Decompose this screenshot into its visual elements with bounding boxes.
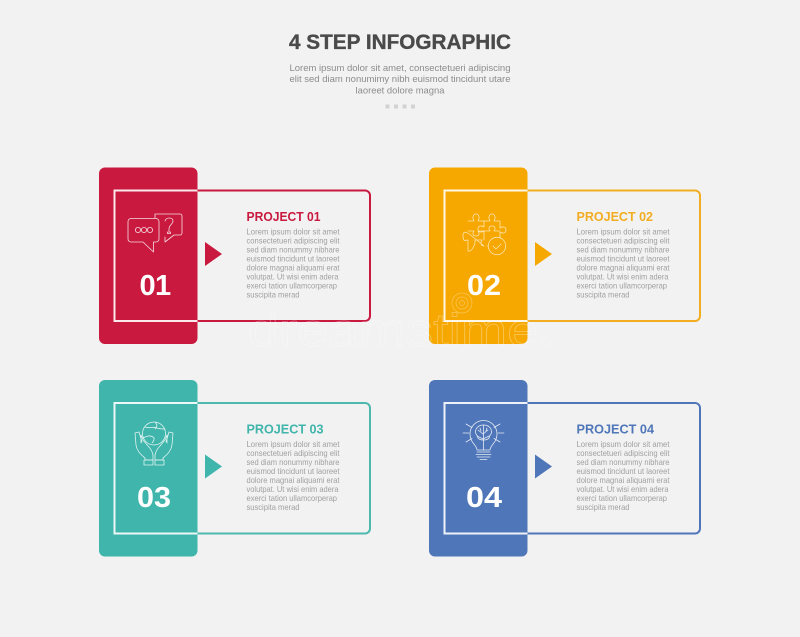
- icon: light bulb with brain: [463, 420, 504, 460]
- body text 03: dolore magnai aliquami erat: [246, 475, 340, 485]
- outline frame 03: [114, 403, 370, 534]
- arrow 02: [535, 242, 552, 266]
- subtitle: [290, 62, 510, 96]
- watermark: [248, 293, 550, 356]
- body text 03: suscipita merad: [246, 502, 300, 512]
- body text 04: [576, 439, 670, 512]
- body text 04: sed diam nonummy nibhare: [576, 457, 670, 467]
- step number 04: 04: [466, 482, 502, 514]
- body text 02: euismod tincidunt ut laoreet: [576, 254, 670, 264]
- panel: project 01: [99, 168, 370, 344]
- outline frame 02: [444, 190, 700, 321]
- body text 01: consectetueri adipiscing elit: [246, 236, 340, 246]
- body text 03: euismod tincidunt ut laoreet: [246, 466, 340, 476]
- body text 02: [576, 226, 670, 300]
- panel: project 03: [99, 380, 370, 556]
- subtitle: Lorem ipsum dolor sit amet, consectetueri adipiscing: [290, 62, 510, 73]
- colored block 04: [429, 380, 528, 556]
- body text 03: exerci tation ullamcorperap: [246, 493, 337, 503]
- body text 03: sed diam nonummy nibhare: [246, 457, 340, 467]
- body text 03: volutpat. Ut wisi enim adera: [246, 484, 339, 494]
- body text 04: dolore magnai aliquami erat: [576, 475, 670, 485]
- outline frame 01: [114, 190, 370, 321]
- icon: hands holding globe: [135, 422, 173, 465]
- body text 02: exerci tation ullamcorperap: [576, 280, 667, 290]
- body text 02: volutpat. Ut wisi enim adera: [576, 272, 669, 282]
- body text 04: Lorem ipsum dolor sit amet: [576, 439, 670, 449]
- watermark: dreamstime: [248, 304, 538, 356]
- body text 02: consectetueri adipiscing elit: [576, 236, 670, 246]
- body text 03: Lorem ipsum dolor sit amet: [246, 439, 340, 449]
- body text 02: sed diam nonummy nibhare: [576, 244, 670, 254]
- body text 01: exerci tation ullamcorperap: [246, 280, 337, 290]
- heading 01: PROJECT 01: [246, 209, 320, 224]
- body text 04: euismod tincidunt ut laoreet: [576, 466, 670, 476]
- body text 02: suscipita merad: [576, 290, 630, 300]
- body text 01: suscipita merad: [246, 290, 300, 300]
- body text 04: exerci tation ullamcorperap: [576, 493, 667, 503]
- decorative title dots: [386, 104, 415, 108]
- body text 01: sed diam nonummy nibhare: [246, 244, 340, 254]
- body text 03: [246, 439, 340, 512]
- colored block 02: [429, 168, 528, 344]
- body text 04: volutpat. Ut wisi enim adera: [576, 484, 669, 494]
- heading 03: PROJECT 03: [246, 422, 324, 436]
- body text 02: dolore magnai aliquami erat: [576, 262, 670, 272]
- icon: speech bubbles: [128, 214, 182, 252]
- colored block 01: [99, 168, 198, 344]
- step number 02: 02: [467, 270, 501, 302]
- panel: project 04: [429, 380, 700, 556]
- arrow 03: [205, 454, 222, 478]
- step number 01: 01: [140, 270, 171, 302]
- colored block 03: [99, 380, 198, 556]
- body text 04: suscipita merad: [576, 502, 630, 512]
- heading 02: PROJECT 02: [576, 209, 653, 224]
- body text 01: Lorem ipsum dolor sit amet: [246, 226, 340, 236]
- body text 01: volutpat. Ut wisi enim adera: [246, 272, 339, 282]
- title: 4 STEP INFOGRAPHIC: [289, 31, 511, 54]
- body text 04: consectetueri adipiscing elit: [576, 448, 670, 458]
- body text 01: dolore magnai aliquami erat: [246, 262, 340, 272]
- heading 04: PROJECT 04: [576, 422, 655, 436]
- outline frame 04: [444, 403, 700, 534]
- panel: project 02: [429, 168, 700, 344]
- body text 03: consectetueri adipiscing elit: [246, 448, 340, 458]
- arrow 01: [205, 242, 222, 266]
- body text 01: euismod tincidunt ut laoreet: [246, 254, 340, 264]
- subtitle: laoreet dolore magna: [356, 84, 445, 96]
- body text 01: [246, 226, 340, 300]
- arrow 04: [535, 454, 552, 478]
- subtitle: elit sed diam nonumimy nibh euismod tincidunt utare: [290, 73, 510, 84]
- icon: puzzle with check: [463, 214, 506, 255]
- body text 02: Lorem ipsum dolor sit amet: [576, 226, 670, 236]
- step number 03: 03: [137, 482, 171, 514]
